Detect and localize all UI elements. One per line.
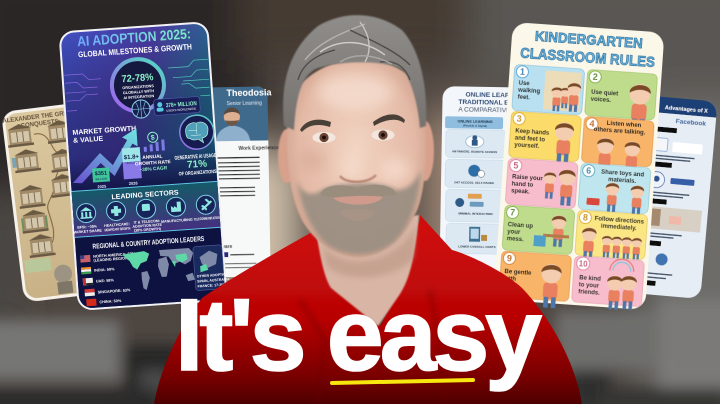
tile 6: 6 — [586, 166, 592, 176]
tile 8: Follow directions — [594, 216, 645, 226]
tile 1: 1 — [520, 67, 525, 77]
country list: CHINA: 50% — [99, 299, 122, 304]
row: interaction — [445, 189, 506, 222]
tile 2: 2 — [592, 72, 598, 82]
panel: leading sectors: LEADING SECTORS — [111, 190, 179, 201]
headline text: It's easy — [175, 278, 542, 392]
heading: regional leaders: REGIONAL & COUNTRY ADOPTION LEADERS — [92, 236, 205, 251]
landmark vignettes — [6, 118, 88, 259]
row: cost: LOWER OVERALL COSTS — [458, 244, 496, 249]
title: AI ADOPTION 2025: — [77, 25, 191, 49]
tile 2: Use quiet — [591, 90, 618, 98]
country list: NORTH AMERICA: 67% — [93, 252, 136, 259]
tile 5: speak. — [511, 188, 530, 196]
tile 10: Be kind — [579, 275, 601, 283]
icon: globe — [131, 99, 151, 119]
column header — [445, 116, 503, 129]
tile 1 — [512, 64, 585, 115]
growth arrow chart: BILLION — [95, 177, 107, 181]
row: cost — [446, 223, 506, 254]
tile 9 — [498, 251, 572, 309]
stat: annual growth — [134, 153, 172, 174]
column header: (Flexible & Digital) — [463, 124, 487, 128]
world map — [122, 248, 196, 292]
tile 9: Be gentle — [504, 269, 532, 277]
neck shadow — [322, 225, 416, 277]
heading: map title — [2, 110, 77, 132]
row: interaction: MINIMAL INTERACTION — [458, 211, 493, 216]
column header: ONLINE LEARNING — [457, 119, 493, 124]
stat: generative AI usage: GENERATIVE AI USAGE — [174, 153, 217, 162]
panel: AI adoption infographic — [58, 21, 232, 311]
country list: SINGAPORE: 53% — [98, 288, 131, 294]
heading: map title: ALEXANDER THE GREAT — [2, 110, 76, 125]
headline — [175, 278, 542, 392]
title: KINDERGARTEN — [534, 28, 643, 51]
panel: leading sectors: MARKET SHARE — [73, 228, 103, 235]
row: location — [445, 129, 506, 158]
tile 5: hand to — [511, 181, 534, 189]
neck — [316, 215, 419, 326]
presenter — [154, 15, 582, 404]
shirt — [154, 215, 582, 404]
inset: Europe — [193, 244, 231, 291]
tile 2 — [584, 69, 658, 131]
mini map — [24, 257, 52, 273]
panel: regional leaders — [79, 234, 231, 306]
tile 6 — [578, 163, 651, 215]
mustache and mouth — [320, 185, 397, 221]
country list: UAE: 58% — [96, 278, 115, 284]
tile 4: others are talking. — [593, 127, 646, 137]
tile 8: 8 — [583, 212, 588, 223]
ears — [278, 121, 434, 183]
tile 5: Raise your — [512, 174, 544, 183]
stat: generative AI usage: 71% — [187, 159, 208, 171]
groups section — [643, 161, 696, 199]
tile 6: Share toys and — [601, 170, 645, 179]
work history text: Work Experience — [238, 145, 279, 152]
messenger section — [629, 239, 675, 287]
row: schedule — [445, 159, 505, 188]
growth arrow chart: 2025 — [97, 184, 107, 189]
panel: leading sectors: IT & TELECOM: — [134, 219, 160, 225]
panel: Theodosia CV — [195, 86, 281, 278]
tile 3: yourself. — [514, 142, 540, 150]
face highlights — [299, 74, 410, 182]
tile 10: friends. — [578, 289, 600, 297]
pill: users: USERS WORLDWIDE — [166, 107, 196, 113]
inset: Europe: OTHER ADOPTION — [197, 272, 229, 279]
panel: leading sectors: SIGNIFICANT GROWTH — [104, 227, 131, 232]
stat: generative AI usage — [174, 153, 218, 178]
row: schedule: 24/7 ACCESS, SELF-PACED — [454, 180, 495, 185]
stat ring: 72-78% — [121, 72, 154, 85]
friends section — [638, 197, 703, 241]
eyebrows — [300, 114, 405, 132]
panel: leading sectors: (38% GROWTH) — [134, 227, 162, 233]
heading: advantages: Facebook — [675, 118, 707, 128]
software section: Software — [211, 244, 233, 250]
work history text — [209, 145, 280, 197]
heading: comparison title: ONLINE LEARNING — [466, 92, 526, 100]
stat ring — [110, 57, 166, 113]
tile 1: Use — [518, 81, 530, 87]
tile 7: 7 — [510, 207, 515, 218]
pill: users: 378+ MILLION — [166, 101, 197, 109]
stat: annual growth: ~38% CAGR — [139, 165, 168, 173]
growth arrow chart: 2026 — [129, 180, 139, 186]
tile 4 — [581, 116, 654, 178]
title: CLASSROOM RULES — [520, 46, 656, 71]
stat: generative AI usage: OF ORGANIZATIONS — [178, 169, 217, 178]
tile 9: with — [503, 276, 516, 283]
icon: brain — [179, 114, 215, 150]
tile 1: feet. — [517, 95, 530, 101]
stat: annual growth: ANNUAL — [142, 154, 163, 161]
route line — [34, 131, 71, 243]
panel: leading sectors: BFSI: ~35% — [77, 224, 98, 230]
panel: leading sectors: HEALTHCARE: — [104, 222, 130, 228]
country list — [80, 252, 139, 306]
growth arrow chart: $351 — [95, 171, 107, 177]
tile 2: voices. — [590, 97, 611, 104]
heading: comparison title: TRADITIONAL EDUCATION — [458, 99, 543, 107]
tile 8: immediately. — [601, 224, 637, 232]
beard — [297, 170, 421, 254]
panel: leading sectors: MANUFACTURING — [161, 218, 193, 224]
shirt fold shading — [300, 290, 446, 404]
growth arrow chart: TRILLION — [125, 160, 139, 165]
circuit decoration — [64, 59, 211, 111]
statue head — [53, 264, 74, 295]
tile 3 — [508, 111, 581, 165]
tile 7: Clean up — [507, 222, 534, 230]
country list: INDIA: 59% — [94, 267, 115, 273]
hair strands — [298, 22, 410, 80]
feed section — [648, 126, 704, 163]
title: GLOBAL MILESTONES & GROWTH — [78, 42, 192, 59]
tile 3: and feet to — [515, 135, 546, 144]
tile 3: Keep hands — [515, 128, 550, 137]
heading: name — [226, 87, 273, 107]
tile 4: Listen when — [606, 121, 642, 129]
tile 8 — [575, 210, 648, 263]
inset: Europe: FRANCE: 17-35% — [197, 282, 227, 288]
stat ring: AI INTEGRATION — [123, 94, 155, 100]
heading: market growth — [72, 125, 137, 145]
stat ring: ORGANIZATIONS — [122, 84, 154, 90]
heading: comparison title — [458, 91, 543, 115]
stat: annual growth: GROWTH RATE — [135, 159, 172, 168]
tile 7: mess. — [507, 236, 524, 243]
heading: comparison title: A COMPARATIVE GUIDE — [458, 106, 534, 115]
row: location: ANYWHERE, REMOTE ACCESS — [452, 149, 497, 154]
tile 4: 4 — [589, 119, 595, 129]
tile 7: your — [507, 229, 521, 236]
icon: dollar growth — [143, 131, 165, 152]
tile 3: 3 — [516, 114, 522, 124]
tile 5: 5 — [513, 160, 519, 171]
tile 6: materials. — [608, 177, 637, 185]
hair — [283, 15, 426, 130]
panel: leading sectors — [70, 181, 221, 238]
growth arrow chart: $1.8+ — [124, 154, 140, 161]
heading: market growth: MARKET GROWTH — [72, 125, 136, 137]
portrait — [216, 107, 250, 141]
tile 9: 9 — [507, 253, 512, 264]
panel: leading sectors: TELECOMMUNICATION — [194, 216, 220, 222]
heading: name: Theodosia — [226, 87, 273, 98]
country list: (LEADING REGION) — [93, 256, 130, 263]
inset: Europe: SPAIN, AUSTRALIA — [197, 277, 230, 283]
icon: dollar growth: $ — [151, 135, 155, 142]
heading: market growth: & VALUE — [73, 136, 104, 145]
face — [287, 59, 426, 257]
growth arrow chart — [70, 128, 142, 191]
heading: advantages: Advantages of X — [665, 105, 708, 115]
tile 10: to your — [578, 282, 600, 290]
software section — [211, 244, 257, 269]
eyes — [312, 130, 394, 143]
heading: map title: CONQUESTS — [20, 119, 59, 130]
panel: kindergarten classroom rules — [493, 22, 665, 315]
nose shadow — [340, 175, 376, 182]
title — [520, 27, 657, 71]
pill: users — [153, 96, 200, 116]
tile 5 — [505, 158, 578, 209]
panel: leading sectors: ADOPTION RATE — [132, 223, 163, 229]
panel: online vs traditional learning — [439, 86, 543, 284]
tile 1: walking — [517, 88, 541, 95]
yellow underline — [332, 380, 473, 383]
title — [77, 25, 192, 59]
tile 10 — [571, 256, 645, 311]
tile 10: 10 — [578, 259, 588, 269]
heading: name: Senior Learning — [227, 101, 262, 107]
stat ring: GLOBALLY WITH — [123, 89, 154, 95]
panel: Alexander conquests map — [1, 91, 193, 303]
tile 7 — [502, 205, 575, 255]
heading: advantages — [663, 105, 708, 128]
panel: Facebook advantages — [629, 95, 718, 299]
